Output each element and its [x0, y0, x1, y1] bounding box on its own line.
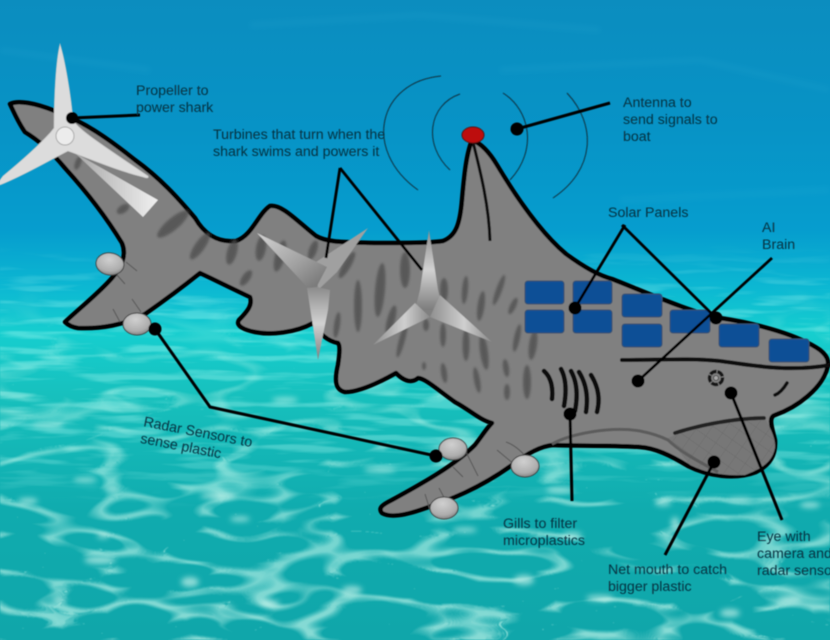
label: antenna: Antenna to: [623, 95, 692, 111]
dorsal fin inner line: [473, 142, 490, 241]
label: eye: camera and: [757, 546, 830, 562]
nostril: [775, 383, 787, 395]
label: gills: microplastics: [503, 533, 585, 549]
turbine: right: [373, 230, 492, 345]
label: propeller: power shark: [136, 100, 214, 116]
label: net mouth: bigger plastic: [608, 579, 692, 595]
snout line: [622, 359, 830, 368]
solar panels: [525, 281, 809, 362]
tail shaft: [75, 153, 158, 217]
label: antenna: send signals to: [623, 112, 718, 128]
label: eye: Eye with: [757, 529, 811, 545]
callout line: AI brain: [632, 258, 772, 388]
label: radar sensors: Radar Sensors to: [142, 414, 254, 451]
propeller: [0, 44, 148, 185]
signal arcs: [384, 76, 587, 198]
callout line: antenna: [510, 103, 610, 136]
antenna tip: [462, 127, 484, 143]
label: solar panels: Solar Panels: [608, 205, 688, 221]
radar sensors: [95, 251, 539, 519]
callout line: propeller: [66, 112, 140, 124]
callout line: radar sensors: [148, 322, 442, 462]
tiger stripes: [73, 155, 539, 400]
label: net mouth: Net mouth to catch: [608, 562, 727, 578]
label: radar sensors: sense plastic: [139, 431, 223, 462]
label: antenna: boat: [623, 129, 651, 145]
eye: [710, 372, 722, 384]
pectoral fin detail marks: [113, 262, 527, 510]
turbine: left: [257, 228, 368, 360]
label: turbines: Turbines that turn when the: [213, 127, 385, 143]
callout line: gills: [564, 408, 576, 501]
callout line: eye: [724, 386, 782, 520]
label: turbines: shark swims and powers it: [213, 144, 379, 160]
net mouth: [552, 418, 775, 475]
callout line: net mouth: [665, 456, 720, 555]
label: AI brain: AI: [762, 220, 775, 236]
label: propeller: Propeller to: [136, 83, 209, 99]
gills: [544, 369, 599, 412]
callout line: solar panels: [568, 225, 722, 324]
label: gills: Gills to filter: [503, 516, 577, 532]
shark body: [10, 102, 828, 516]
callout line: turbines: [326, 168, 422, 270]
label: AI brain: Brain: [762, 237, 795, 253]
